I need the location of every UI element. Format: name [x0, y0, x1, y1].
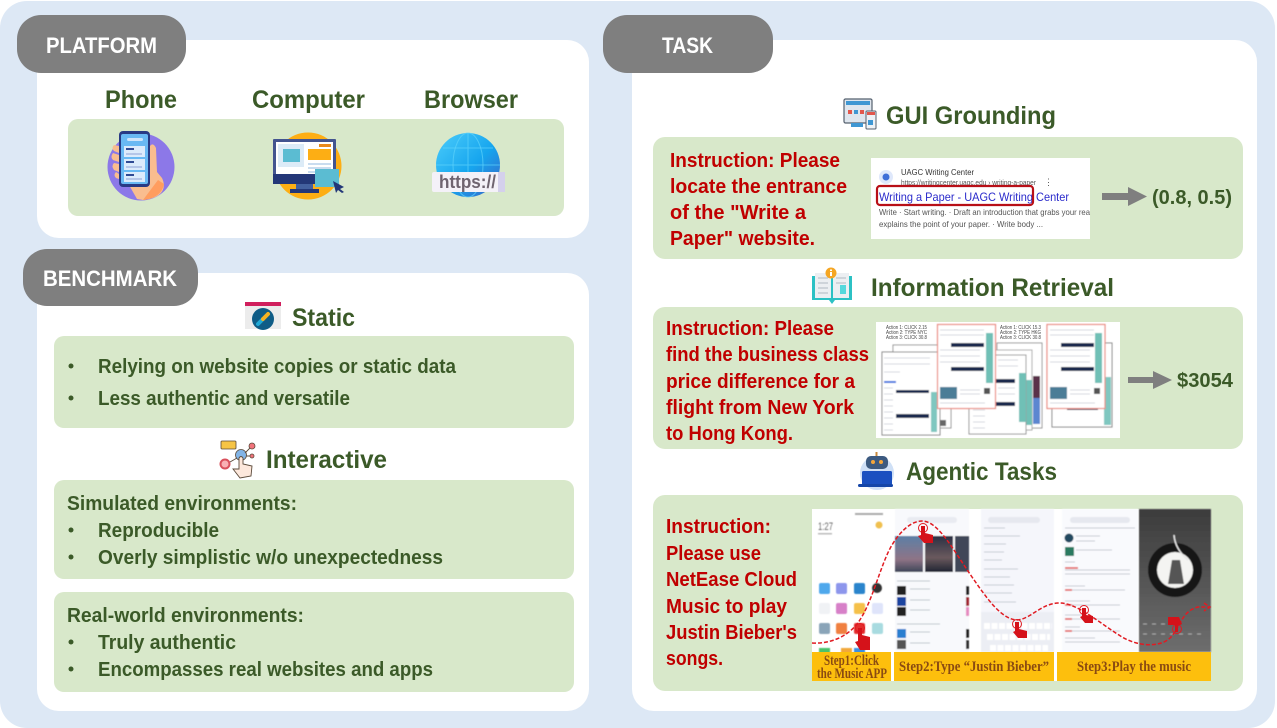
- tab: benchmark heading: BENCHMARK: [43, 266, 177, 291]
- platform icons strip: [68, 119, 564, 216]
- instruction text: songs.: [666, 647, 723, 670]
- search result screenshot: Writing a Paper - UAGC Writing Center: [879, 190, 1069, 204]
- label: browser: Browser: [424, 86, 518, 114]
- box: static benchmark traits: [54, 336, 574, 428]
- instruction text: Instruction:: [666, 515, 771, 538]
- screen: music home: [895, 509, 969, 652]
- flight search screenshots: Action 3: CLICK 30.8: [886, 335, 927, 341]
- panel: task: [603, 15, 1257, 711]
- instruction text: NetEase Cloud: [666, 568, 797, 591]
- box: GUI grounding example: [653, 137, 1243, 259]
- step bar 3: Step3:Play the music: [1077, 659, 1191, 675]
- step bar 2: Step2:Type “Justin Bieber”: [899, 659, 1049, 675]
- arrow: to price: [1128, 371, 1172, 389]
- label: phone: Phone: [105, 86, 177, 114]
- screen: home with app icons: 1:27: [818, 521, 833, 533]
- box: static benchmark traits: Relying on website copies or static data: [98, 355, 457, 378]
- icon: computer: [273, 132, 344, 200]
- search result screenshot: ⋮: [1044, 177, 1053, 187]
- instruction text: Paper" website.: [670, 227, 815, 250]
- icon: tap hand step 3: [1012, 620, 1027, 638]
- box: real-world environments: Encompasses real websites and apps: [98, 658, 433, 681]
- screen: search results: [1062, 509, 1138, 652]
- tab: task heading: [603, 15, 773, 73]
- arrow: dashed trajectory: [812, 521, 1210, 645]
- search result screenshot: Write · Start writing. · Draft an introduction that grabs your rea: [879, 207, 1090, 217]
- flight search screenshots: Action 1: CLICK 15.3: [1000, 325, 1041, 331]
- panel: platform: [17, 15, 589, 238]
- tab: platform heading: PLATFORM: [46, 33, 157, 58]
- box: simulated environments: [54, 480, 574, 579]
- screen: search keyboard: [981, 509, 1054, 652]
- panel: benchmark: [23, 249, 589, 711]
- icon: static page link: [245, 302, 281, 330]
- step bar 1: Step1:Click: [824, 653, 880, 669]
- step bar 1: [812, 652, 891, 682]
- flight search screenshots: [876, 322, 1120, 438]
- icon: open book with info badge: [812, 268, 852, 304]
- search result screenshot: https://writingcenter.uagc.edu › writing-a-paper: [901, 178, 1036, 187]
- instruction text: Instruction: Please: [670, 149, 840, 172]
- heading: static: Static: [292, 304, 355, 332]
- instruction text: price difference for a: [666, 370, 856, 393]
- tab: platform heading: [17, 15, 186, 73]
- instruction text: [670, 149, 847, 250]
- music app walkthrough screenshots: [812, 509, 1211, 681]
- icon: tap hand step 5: [1168, 617, 1182, 634]
- icon: tap hand step 1: [855, 624, 870, 650]
- icon: tap hand step 2: [918, 524, 933, 543]
- heading: agentic tasks: Agentic Tasks: [906, 458, 1057, 486]
- instruction text: Justin Bieber's: [666, 621, 797, 644]
- box: agentic task example: [653, 495, 1243, 691]
- instruction text: find the business class: [666, 343, 869, 366]
- heading: information retrieval: Information Retrieval: [871, 274, 1114, 302]
- result: coordinates: (0.8, 0.5): [1152, 186, 1232, 209]
- box: simulated environments: Reproducible: [98, 519, 219, 542]
- step bar 1: the Music APP: [817, 666, 887, 682]
- heading: GUI grounding: GUI Grounding: [886, 102, 1056, 130]
- search result screenshot: explains the point of your paper. · Write body ...: [879, 219, 1043, 229]
- box: simulated environments: Overly simplistic w/o unexpectedness: [98, 546, 443, 569]
- tab: task heading: TASK: [662, 33, 713, 58]
- screen: home with app icons: [818, 513, 883, 653]
- box: static benchmark traits: Less authentic and versatile: [98, 387, 350, 410]
- flight search screenshots: Action 2: TYPE NYC: [886, 330, 927, 336]
- icon: GUI screens: [844, 99, 876, 129]
- arrow: to coordinates: [1102, 187, 1147, 206]
- icon: interactive network and hand: [220, 441, 255, 478]
- instruction text: [666, 515, 797, 670]
- box: real-world environments: [54, 592, 574, 692]
- flight search screenshots: Action 1: CLICK 2.15: [886, 325, 927, 331]
- icon: phone in hand: [108, 131, 174, 200]
- box: information retrieval example: [653, 307, 1243, 449]
- result: price difference: $3054: [1177, 369, 1234, 392]
- icon: https globe: https://: [439, 172, 496, 192]
- icon: tap hand step 4: [1080, 606, 1093, 623]
- step bar 2: [894, 652, 1054, 681]
- box: simulated environments: Simulated environments:: [67, 492, 297, 515]
- flight search screenshots: Action 2: TYPE HKG: [1000, 330, 1041, 336]
- label: computer: Computer: [252, 86, 365, 114]
- box: real-world environments: Real-world environments:: [67, 604, 304, 627]
- icon: https globe: [432, 133, 505, 197]
- step bar 3: [1057, 652, 1211, 681]
- instruction text: [666, 317, 869, 445]
- icon: robot with laptop: [858, 452, 894, 490]
- search result screenshot: UAGC Writing Center: [901, 167, 974, 177]
- screen: now playing: [1139, 509, 1211, 652]
- tab: benchmark heading: [23, 249, 198, 306]
- heading: interactive: Interactive: [266, 446, 387, 474]
- flight search screenshots: Action 3: CLICK 30.8: [1000, 335, 1041, 341]
- instruction text: Instruction: Please: [666, 317, 834, 340]
- instruction text: flight from New York: [666, 396, 855, 419]
- instruction text: of the "Write a: [670, 201, 807, 224]
- search result screenshot: [871, 158, 1090, 239]
- instruction text: locate the entrance: [670, 175, 847, 198]
- instruction text: Please use: [666, 542, 761, 565]
- instruction text: to Hong Kong.: [666, 422, 793, 445]
- instruction text: Music to play: [666, 595, 788, 618]
- box: real-world environments: Truly authentic: [98, 631, 236, 654]
